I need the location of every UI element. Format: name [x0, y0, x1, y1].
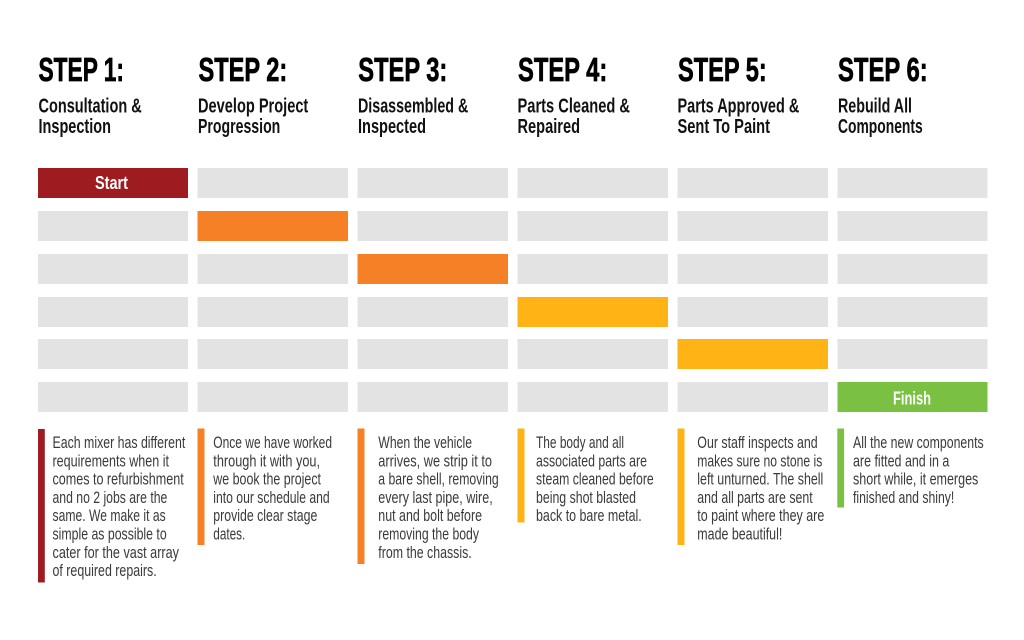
start bar: Start [95, 173, 128, 193]
step 2 bar [198, 211, 348, 241]
step 2 description: into our schedule and [213, 488, 330, 507]
step 6 heading: STEP 6: [838, 52, 928, 89]
step 4 description: being shot blasted [536, 488, 636, 507]
step 3 description: When the vehicle [378, 433, 472, 452]
step 4 heading: STEP 4: [518, 52, 607, 89]
step 6 description: finished and shiny! [853, 488, 954, 507]
start bar [38, 168, 188, 198]
step 5 bar [678, 339, 828, 369]
step 5 heading: STEP 5: [678, 52, 767, 89]
step 3 description: every last pipe, wire, [378, 488, 493, 507]
step 2 description [213, 433, 332, 544]
step 3 bar [358, 254, 508, 284]
step 2 accent bar [198, 428, 204, 545]
step 2 heading [198, 52, 308, 138]
step 5 description: makes sure no stone is [697, 451, 822, 470]
step 3 description [378, 433, 499, 562]
step 4 heading: Parts Cleaned & [518, 95, 630, 118]
step 3 description: arrives, we strip it to [378, 451, 492, 470]
step 6 accent bar [837, 428, 844, 508]
step 5 description: left unturned. The shell [697, 470, 823, 489]
step 5 description: made beautiful! [697, 524, 782, 544]
step 1 description: and no 2 jobs are the [52, 488, 167, 507]
step 1 description: of required repairs. [52, 561, 157, 580]
step 1 description: comes to refurbishment [52, 470, 184, 489]
step 6 heading: Rebuild All [838, 95, 912, 118]
finish bar: Finish [893, 388, 931, 408]
step 1 description: same. We make it as [52, 506, 166, 525]
step 5 description: Our staff inspects and [697, 433, 818, 452]
step 2 description: dates. [213, 524, 245, 544]
step 1 description: requirements when it [52, 451, 169, 470]
step 3 heading: Disassembled & [358, 95, 468, 118]
step 2 heading: STEP 2: [198, 52, 287, 89]
step 2 description: Once we have worked [213, 433, 332, 452]
step 2 heading: Develop Project [198, 95, 308, 118]
step 3 heading [358, 52, 468, 138]
step 5 heading: Parts Approved & [678, 95, 799, 118]
step 4 accent bar [518, 428, 524, 522]
step 5 heading: Sent To Paint [678, 115, 770, 138]
step 1 heading: Inspection [38, 115, 111, 138]
step 6 heading: Components [838, 115, 923, 138]
step 3 description: a bare shell, removing [378, 470, 499, 489]
step 5 description [697, 433, 824, 544]
step 3 accent bar [358, 428, 364, 564]
step 3 description: from the chassis. [378, 543, 472, 562]
step 2 description: through it with you, [213, 451, 320, 470]
step 1 description: cater for the vast array [52, 543, 179, 562]
step 6 description [853, 433, 984, 507]
step 4 description: The body and all [536, 433, 624, 452]
step 4 bar [518, 297, 668, 327]
step 1 accent bar [38, 429, 45, 582]
step 3 heading: STEP 3: [358, 52, 447, 89]
step 5 description: to paint where they are [697, 506, 824, 525]
step 4 description: back to bare metal. [536, 506, 642, 525]
step 1 heading: STEP 1: [38, 52, 124, 89]
step 5 accent bar [678, 428, 684, 545]
step 6 heading [838, 52, 928, 138]
step 4 description [536, 433, 654, 525]
step 3 description: nut and bolt before [378, 506, 482, 525]
step 4 heading [518, 52, 630, 138]
step 2 description: provide clear stage [213, 506, 317, 525]
step 4 description: associated parts are [536, 451, 647, 470]
step 2 description: we book the project [213, 470, 321, 489]
step 5 heading [678, 52, 799, 138]
step 3 heading: Inspected [358, 115, 426, 138]
step 1 heading: Consultation & [38, 95, 142, 118]
finish bar [838, 382, 988, 412]
step 1 heading [38, 52, 142, 138]
step 6 description: are fitted and in a [853, 451, 950, 470]
step 3 description: removing the body [378, 524, 479, 544]
step 1 description: Each mixer has different [52, 433, 186, 452]
step 4 description: steam cleaned before [536, 470, 654, 489]
step tracker grid [38, 168, 988, 412]
step 4 heading: Repaired [518, 115, 580, 138]
step 1 description: simple as possible to [52, 524, 167, 544]
step 1 description [52, 433, 186, 580]
step 6 description: short while, it emerges [853, 470, 978, 489]
step 2 heading: Progression [198, 115, 280, 138]
step 5 description: and all parts are sent [697, 488, 813, 507]
